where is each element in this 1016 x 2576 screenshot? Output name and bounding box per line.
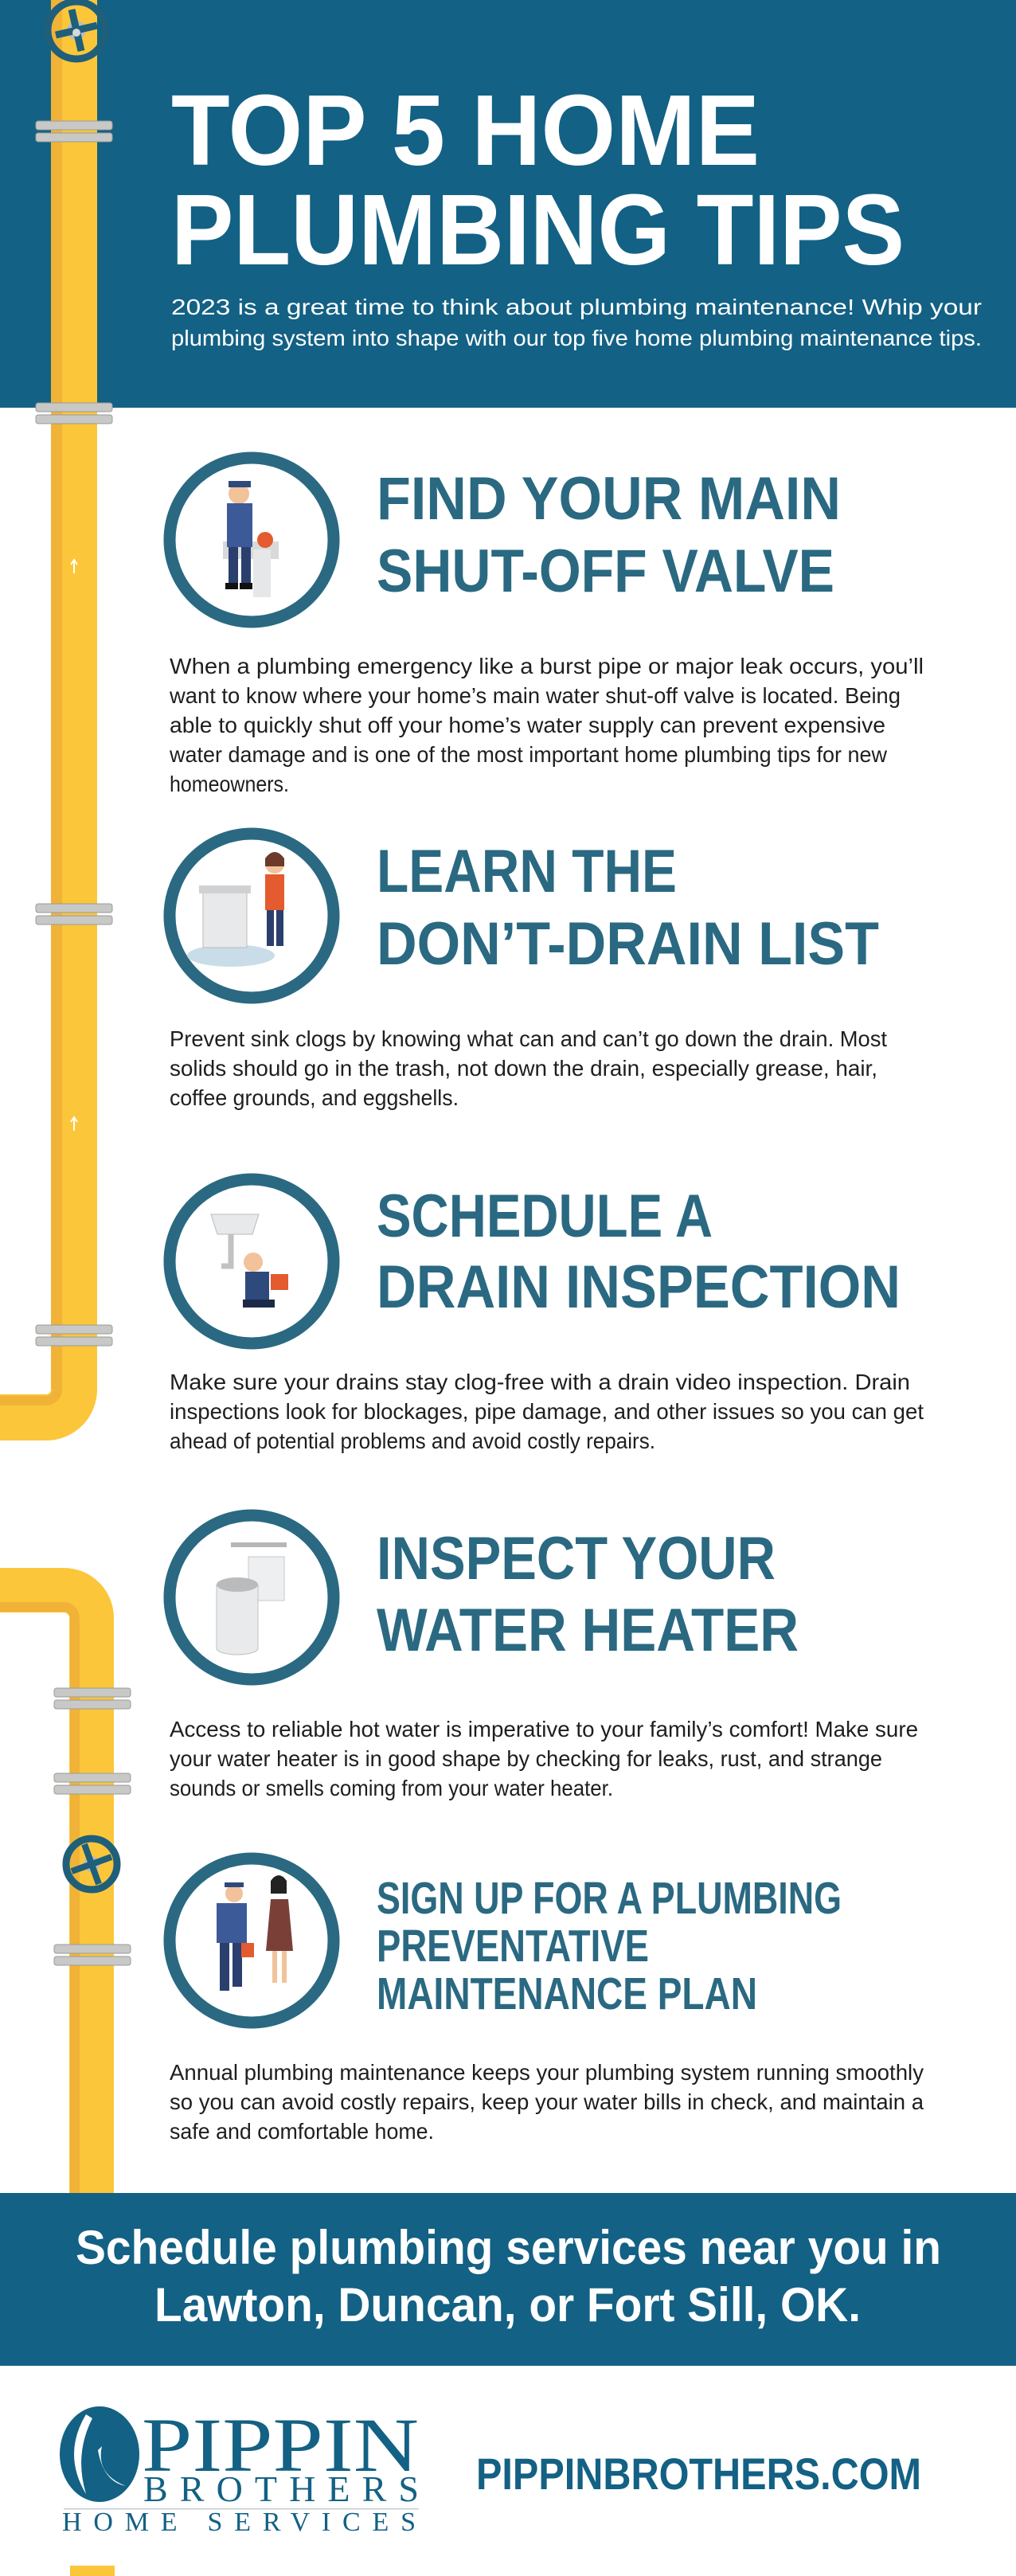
heading	[377, 1525, 799, 1664]
website URL: PIPPINBROTHERS.COM	[476, 2449, 921, 2499]
body text: coffee grounds, and eggshells.	[170, 1085, 459, 1110]
section 2	[170, 834, 887, 1110]
section 5	[170, 1859, 924, 2144]
section 3	[170, 1179, 924, 1453]
logo: BROTHERS	[143, 2469, 419, 2509]
subtitle: plumbing system into shape with our top five home plumbing maintenance tips.	[171, 326, 982, 350]
section 1	[169, 458, 924, 796]
heading: LEARN THE	[377, 838, 677, 905]
logo	[60, 2402, 419, 2537]
CTA band: Lawton, Duncan, or Fort Sill, OK.	[154, 2278, 861, 2332]
icon: water heater	[170, 1515, 334, 1679]
heading: FIND YOUR MAIN	[377, 465, 841, 533]
icon: valve wheel top	[48, 2, 105, 59]
title	[171, 74, 905, 286]
title: PLUMBING TIPS	[171, 174, 905, 286]
heading	[377, 465, 841, 605]
heading: SHUT-OFF VALVE	[377, 537, 834, 605]
icon: valve wheel lower	[66, 1839, 117, 1890]
heading: WATER HEATER	[377, 1597, 799, 1664]
title: TOP 5 HOME	[171, 74, 760, 186]
body text: ahead of potential problems and avoid costly repairs.	[170, 1429, 655, 1453]
body text: inspections look for blockages, pipe damage, and other issues so you can get	[170, 1399, 924, 1424]
heading	[377, 1182, 901, 1321]
body text	[170, 1026, 887, 1110]
body text: sounds or smells coming from your water heater.	[170, 1776, 613, 1800]
body text: able to quickly shut off your home’s water supply can prevent expensive	[170, 713, 885, 737]
icon: plumber at valve	[170, 458, 334, 622]
logo: HOME SERVICES	[62, 2508, 416, 2537]
heading: INSPECT YOUR	[377, 1525, 776, 1593]
body text: solids should go in the trash, not down the drain, especially grease, hair,	[170, 1056, 877, 1081]
body text: Annual plumbing maintenance keeps your plumbing system running smoothly	[170, 2060, 924, 2085]
heading	[377, 1873, 842, 2019]
section 4	[170, 1515, 918, 1800]
subtitle: 2023 is a great time to think about plumbing maintenance! Whip your	[171, 295, 982, 319]
CTA band	[0, 2193, 1016, 2366]
body text: your water heater is in good shape by checking for leaks, rust, and strange	[170, 1746, 882, 1771]
body text: want to know where your home’s main water shut-off valve is located. Being	[169, 683, 901, 708]
body text: Prevent sink clogs by knowing what can and can’t go down the drain. Most	[170, 1026, 887, 1051]
body text: so you can avoid costly repairs, keep your water bills in check, and maintain a	[170, 2089, 924, 2114]
heading: MAINTENANCE PLAN	[377, 1968, 757, 2019]
heading: DRAIN INSPECTION	[377, 1253, 901, 1321]
body text	[169, 654, 924, 796]
body text	[170, 1717, 918, 1800]
heading	[377, 838, 879, 978]
body text: water damage and is one of the most important home plumbing tips for new	[169, 742, 888, 767]
icon: plumber and homeowner	[170, 1859, 334, 2023]
icon: logo swirl	[60, 2406, 139, 2502]
body text: Make sure your drains stay clog-free with a drain video inspection. Drain	[170, 1370, 910, 1394]
CTA band: Schedule plumbing services near you in	[76, 2221, 941, 2274]
logo: PIPPIN	[142, 2402, 419, 2488]
flanges	[36, 121, 131, 1965]
body text: safe and comfortable home.	[170, 2119, 434, 2144]
heading: DON’T-DRAIN LIST	[377, 910, 879, 978]
body text: When a plumbing emergency like a burst pipe or major leak occurs, you’ll	[170, 654, 924, 678]
body text: homeowners.	[170, 772, 289, 796]
body text	[170, 1370, 924, 1453]
pipe: lower	[0, 1590, 115, 2576]
header band	[0, 0, 1016, 408]
subtitle	[171, 295, 982, 350]
icon: woman at sink with leak	[170, 834, 334, 998]
arrows on pipe	[71, 560, 77, 1131]
icon: plumber kneeling under sink	[170, 1179, 334, 1343]
heading: PREVENTATIVE	[377, 1921, 649, 1972]
body text	[170, 2060, 924, 2144]
pipe: upper	[0, 0, 74, 1417]
heading: SCHEDULE A	[377, 1182, 713, 1250]
heading: SIGN UP FOR A PLUMBING	[377, 1873, 842, 1924]
body text: Access to reliable hot water is imperative to your family’s comfort! Make sure	[170, 1717, 918, 1741]
